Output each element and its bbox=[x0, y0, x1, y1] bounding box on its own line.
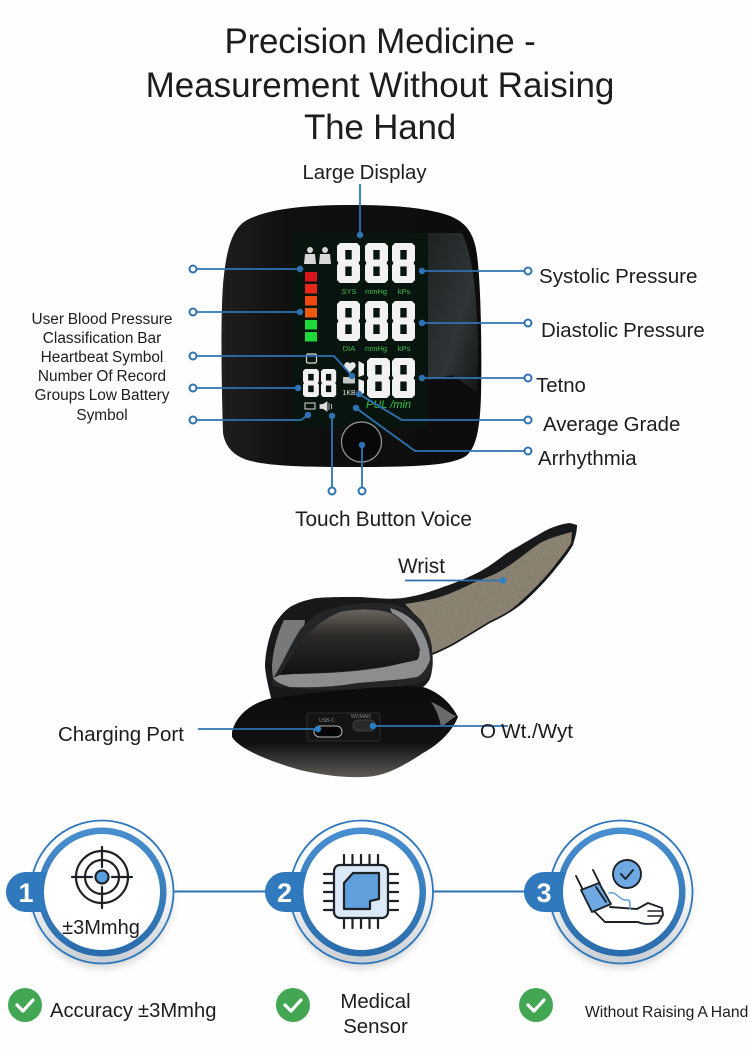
systolic digits bbox=[337, 243, 415, 283]
cuff inner mesh rim bbox=[273, 608, 430, 687]
right labels bbox=[536, 265, 705, 470]
number badge: 3 bbox=[536, 878, 552, 908]
left label block: Groups Low Battery bbox=[34, 387, 170, 404]
record digits bbox=[303, 369, 336, 397]
label: medical sensor bbox=[340, 991, 411, 1038]
callouts: cuff bbox=[198, 577, 508, 732]
left label block: Number Of Record bbox=[38, 368, 166, 385]
check: medical sensor bbox=[276, 988, 310, 1022]
left label block: Symbol bbox=[76, 407, 128, 424]
ring bbox=[550, 820, 692, 964]
right labels: Systolic Pressure bbox=[539, 265, 697, 288]
number badge bbox=[524, 872, 570, 912]
pulse digits bbox=[358, 358, 415, 398]
left label block: User Blood Pressure bbox=[32, 311, 172, 328]
touch button bbox=[342, 422, 382, 462]
label: charging port: Charging Port bbox=[58, 723, 184, 746]
diastolic units: mmHg bbox=[365, 344, 387, 353]
label: wrist: Wrist bbox=[398, 555, 445, 578]
label: touch button voice: Touch Button Voice bbox=[295, 508, 472, 531]
white disc bbox=[563, 834, 679, 950]
label: medical sensor: Sensor bbox=[343, 1016, 408, 1038]
check: without raising bbox=[519, 988, 553, 1022]
gloss highlight bbox=[431, 702, 456, 727]
right labels: Tetno bbox=[536, 375, 586, 397]
number badge: 1 bbox=[18, 878, 34, 908]
label: accuracy: Accuracy ±3Mmhg bbox=[50, 1000, 216, 1022]
number badge bbox=[265, 872, 311, 912]
PUL min label: PUL /min bbox=[366, 399, 411, 411]
device body bbox=[222, 205, 481, 467]
white disc bbox=[304, 834, 420, 950]
right labels: Arrhythmia bbox=[538, 448, 637, 470]
title: Precision Medicine - bbox=[224, 22, 536, 61]
arrhythmia chip bbox=[343, 377, 355, 384]
connectors between steps bbox=[174, 890, 527, 892]
diastolic units bbox=[343, 344, 410, 353]
systolic units: SYS bbox=[341, 287, 357, 296]
left mesh panel bbox=[272, 620, 305, 685]
switch bbox=[353, 720, 375, 731]
diastolic units: DIA bbox=[343, 344, 355, 353]
heart icon bbox=[344, 362, 356, 372]
white disc bbox=[44, 834, 160, 950]
tiny port legends: WOMAN bbox=[351, 714, 371, 720]
voice icon bbox=[320, 402, 332, 411]
strap and cuff silhouette bbox=[265, 523, 577, 702]
tiny port legends: USB-C bbox=[319, 718, 335, 724]
user icons bbox=[304, 247, 331, 264]
tiny port legends bbox=[319, 714, 371, 724]
check: accuracy bbox=[8, 988, 42, 1022]
ring shadow bbox=[32, 828, 172, 968]
ring shadow bbox=[292, 828, 432, 968]
classification bar bbox=[305, 272, 317, 342]
title: The Hand bbox=[304, 108, 456, 147]
1KB label: 1KB bbox=[342, 390, 356, 397]
panel: blood pressure monitor device bbox=[222, 205, 481, 467]
memory icon bbox=[306, 354, 316, 363]
systolic units: kPs bbox=[398, 287, 410, 296]
base unit bbox=[232, 687, 458, 777]
panel: wrist cuff product bbox=[232, 523, 577, 777]
left label block: Classification Bar bbox=[43, 330, 161, 347]
circle text: ±3Mmhg bbox=[62, 917, 140, 939]
terry lining bbox=[405, 532, 572, 653]
ring bbox=[290, 820, 433, 964]
diastolic digits bbox=[337, 301, 415, 341]
icon: arm with cuff bbox=[576, 860, 663, 924]
cuff interior bbox=[280, 609, 419, 675]
USB-C port bbox=[314, 726, 342, 737]
left label block bbox=[32, 311, 172, 424]
number badge bbox=[6, 872, 52, 912]
systolic units: mmHg bbox=[365, 287, 387, 296]
diastolic units: kPs bbox=[398, 344, 410, 353]
title: Measurement Without Raising bbox=[146, 66, 614, 105]
step 3: hands-free bbox=[524, 820, 692, 968]
ring shadow bbox=[551, 828, 691, 968]
port panel bbox=[307, 713, 380, 741]
glass reflection bbox=[428, 233, 478, 392]
step 2: sensor bbox=[265, 820, 433, 968]
callout lines and markers bbox=[190, 184, 532, 494]
title bbox=[146, 22, 614, 147]
number badge: 2 bbox=[277, 878, 292, 908]
icon: chip bbox=[324, 855, 398, 928]
label: large display: Large Display bbox=[302, 162, 427, 184]
systolic units bbox=[341, 287, 410, 296]
battery icon bbox=[305, 403, 315, 409]
right labels: Diastolic Pressure bbox=[541, 320, 705, 342]
step 1: accuracy bbox=[6, 820, 174, 968]
label: medical sensor: Medical bbox=[340, 991, 411, 1013]
inner layer outline bbox=[272, 603, 433, 690]
label: O Wt./Wyt: O Wt./Wyt bbox=[480, 720, 573, 743]
right labels: Average Grade bbox=[543, 414, 680, 436]
ring bbox=[30, 820, 174, 964]
label: without raising a hand: Without Raising A Hand bbox=[585, 1004, 748, 1021]
display panel bbox=[292, 233, 428, 428]
left label block: Heartbeat Symbol bbox=[41, 349, 163, 366]
icon: target bbox=[72, 847, 132, 908]
